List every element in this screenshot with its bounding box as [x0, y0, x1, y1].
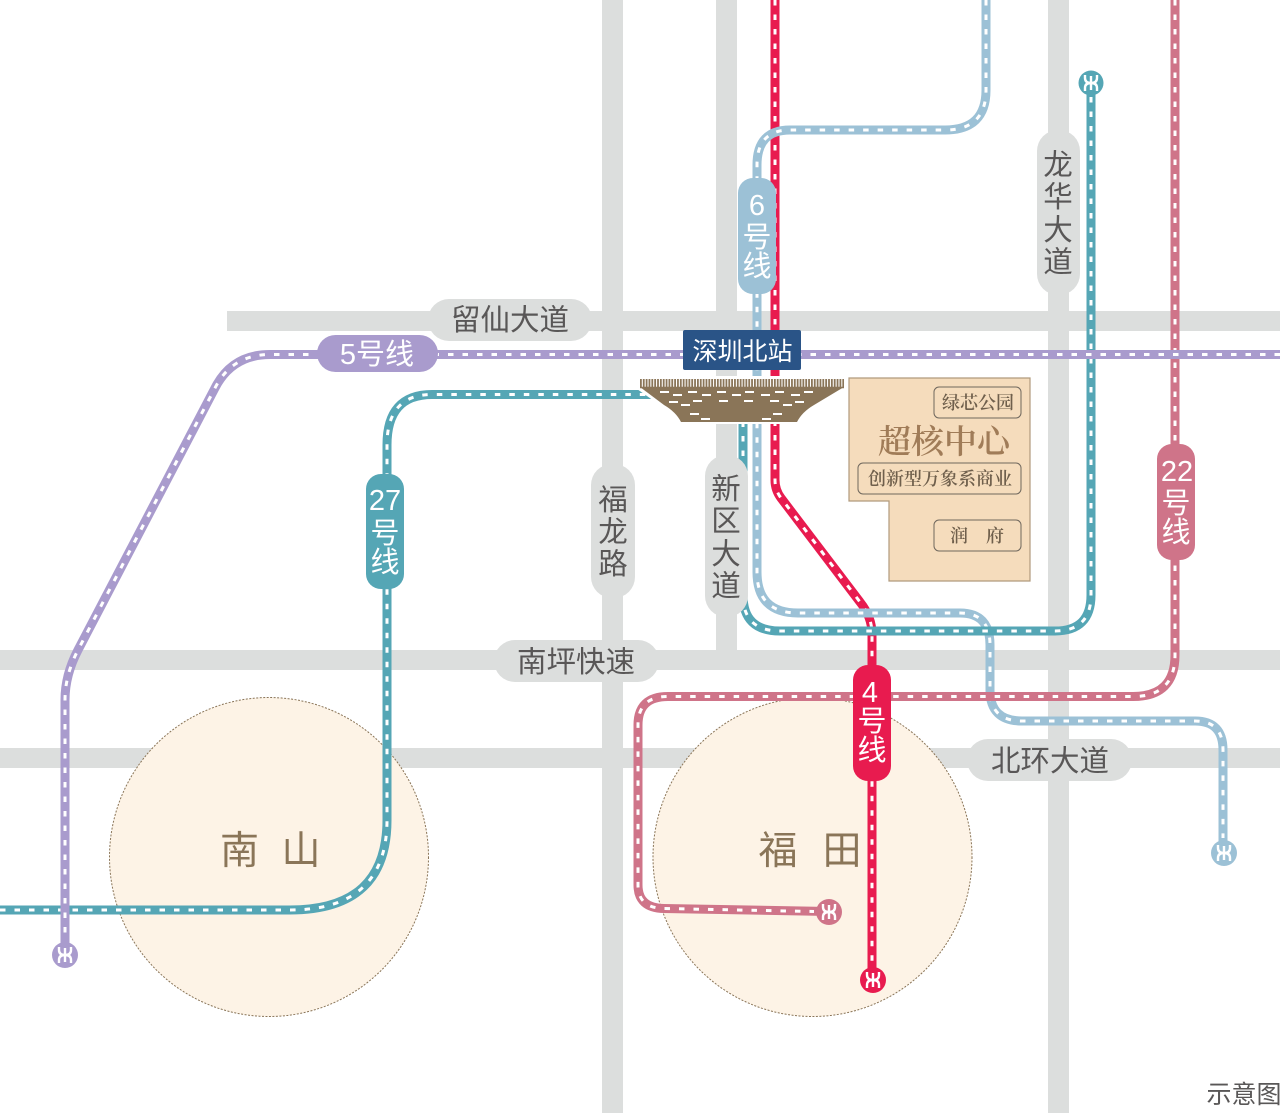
line badge: line 27: 号	[370, 518, 400, 550]
road label: Longhua Avenue: 华	[1043, 181, 1073, 214]
road label: Nanping Express	[494, 640, 659, 682]
line badge: line 4: 4	[862, 677, 878, 709]
metro line 27	[0, 394, 670, 910]
icon: metro terminal line 27	[1078, 70, 1104, 96]
district: Nanshan: 山	[281, 830, 321, 873]
line badge: line 4: 号	[857, 706, 887, 738]
road label: Longhua Avenue: 道	[1043, 246, 1073, 279]
line badge: line 5: 5号线	[340, 338, 414, 371]
district: Nanshan	[110, 698, 428, 1016]
icon: metro terminal line 5	[52, 942, 78, 968]
road label: Beihuan Avenue	[967, 739, 1132, 781]
district: Nanshan: 南	[220, 830, 259, 873]
road label: Xinqu Avenue: 大	[711, 538, 741, 571]
line badge: line 4: 线	[857, 734, 887, 767]
road label: Fulong Road	[591, 464, 635, 598]
line badge: line 4	[853, 665, 891, 781]
road label: Fulong Road: 路	[598, 548, 628, 581]
metro line 6	[757, 0, 1223, 853]
road label: Xinqu Avenue: 道	[711, 570, 741, 603]
line badge: line 27	[366, 474, 404, 589]
line badge: line 27: 27	[369, 485, 401, 517]
metro line 22	[638, 0, 1175, 912]
line badge: line 6: 号	[742, 222, 772, 254]
metro line 4	[775, 0, 872, 980]
heading: super core center: 超核中心	[878, 416, 1013, 463]
line badge: line 27: 线	[370, 546, 400, 579]
panel: Chaohe Center development site	[849, 378, 1030, 581]
road label: Longhua Avenue	[1037, 130, 1080, 295]
road label: Liuxian Avenue: 留仙大道	[451, 304, 569, 337]
line badge: line 6: 线	[742, 250, 772, 283]
district: Futian: 福	[758, 830, 798, 873]
road label: Nanping Express: 南坪快速	[517, 646, 635, 679]
road label: Longhua Avenue: 大	[1043, 214, 1073, 247]
tag: green heart park: 绿芯公园	[942, 389, 1014, 415]
line badge: line 22	[1157, 444, 1195, 560]
icon: metro terminal line 6	[1211, 840, 1237, 866]
road label: Xinqu Avenue: 区	[711, 505, 741, 538]
icon: metro terminal line 4	[860, 967, 886, 993]
station label: Shenzhen North: 深圳北站	[692, 338, 793, 366]
caption: schematic: 示意图	[1206, 1081, 1280, 1109]
metro line 5	[65, 354, 1280, 955]
road label: Xinqu Avenue: 新	[711, 473, 741, 506]
tag: Runfu residence	[934, 520, 1021, 551]
road label: Fulong Road: 福	[598, 484, 628, 517]
line badge: line 6: 6	[749, 190, 765, 222]
station label: Shenzhen North	[683, 330, 801, 370]
metro line 27 east branch	[743, 82, 1091, 631]
line badge: line 22: 22	[1161, 456, 1193, 488]
icon: Shenzhen North station building	[640, 384, 844, 422]
tag: Runfu residence: 润 府	[950, 522, 1004, 548]
road label: Longhua Avenue: 龙	[1043, 149, 1073, 182]
line badge: line 5	[317, 335, 438, 372]
district: Futian: 田	[822, 830, 862, 873]
road label: Liuxian Avenue	[428, 299, 592, 341]
station halo	[637, 376, 847, 424]
icon: metro terminal line 22	[816, 899, 842, 925]
district: Futian	[653, 698, 972, 1016]
tag: innovative MixC commercial: 创新型万象系商业	[868, 465, 1012, 491]
tag: green heart park	[934, 387, 1021, 418]
road label: Xinqu Avenue	[705, 455, 748, 617]
road label: Fulong Road: 龙	[598, 516, 628, 549]
road label: Beihuan Avenue: 北环大道	[991, 745, 1109, 778]
line badge: line 6	[738, 178, 776, 294]
line badge: line 22: 号	[1161, 488, 1191, 520]
line badge: line 22: 线	[1161, 516, 1191, 549]
